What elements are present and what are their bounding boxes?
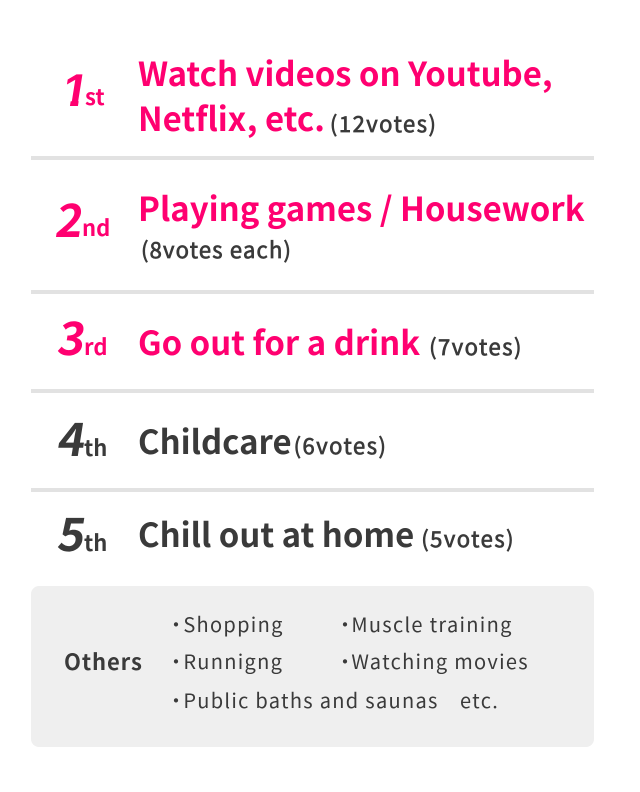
rank 3 label: [54, 303, 108, 369]
rank 5 text: Chill out at home (5votes): [138, 510, 515, 557]
rank 2 votes: (8votes each): [141, 233, 292, 265]
rank 1 label: st: [85, 80, 105, 112]
rank 2 text: Playing games / Housework: [138, 184, 585, 231]
item: watching movies: ・Watching movies: [335, 646, 529, 675]
rank 1 text: [138, 49, 553, 141]
item: muscle training: ・Muscle training: [335, 609, 513, 638]
item: public baths: ・Public baths and saunas: [166, 685, 439, 714]
rank 4 text: Childcare(6votes): [138, 417, 387, 464]
rank 3 label: 3: [54, 303, 91, 369]
rank 5 label: 5: [54, 499, 91, 565]
rank 3 label: rd: [84, 330, 108, 362]
rank 5 label: th: [84, 526, 107, 558]
rank 4 label: 4: [54, 404, 91, 470]
panel: others: [31, 586, 594, 747]
rank 1 label: 1: [59, 64, 93, 116]
rank 2 label: 2: [52, 185, 89, 251]
rank 1 text: Netflix, etc.(12votes): [138, 94, 437, 141]
item: shopping: ・Shopping: [166, 609, 284, 638]
rank 2 label: [52, 185, 110, 251]
rank 4 label: th: [84, 431, 107, 463]
rank 3 text: Go out for a drink (7votes): [138, 318, 523, 365]
item: etc: etc.: [460, 685, 499, 714]
item: running: ・Runnigng: [166, 646, 283, 675]
rank 1 label: [66, 74, 105, 112]
rank 2 label: nd: [82, 211, 110, 243]
rank 1 text: Watch videos on Youtube,: [138, 49, 553, 96]
others heading: Others: [64, 645, 143, 677]
